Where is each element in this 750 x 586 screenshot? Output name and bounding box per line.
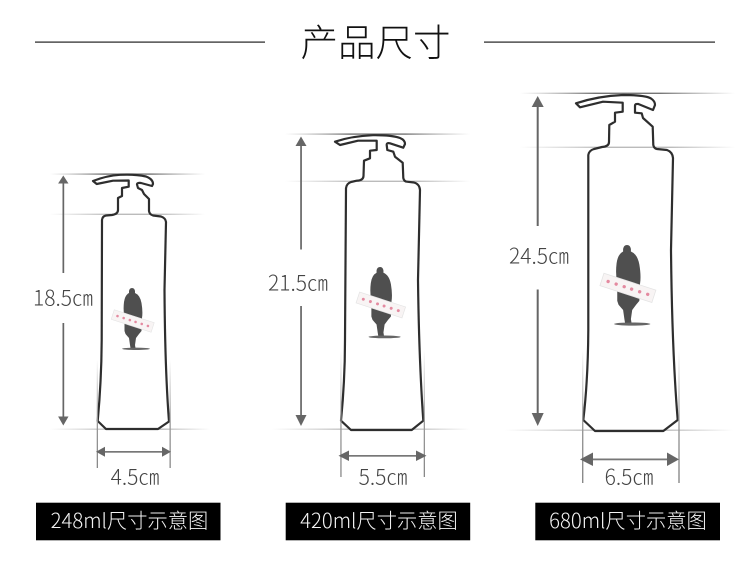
height guide lines [272,133,470,430]
caption: 680ml [535,503,720,540]
height label: 24.5㎝ [509,240,569,270]
bottle outline [335,135,423,430]
width label: 6.5㎝ [605,462,653,492]
height arrow [296,136,306,426]
panel: 248ml bottle [33,173,220,540]
caption: 248ml [36,503,220,540]
title: 产品尺寸 [300,12,450,67]
width arrow and side guides [580,350,680,483]
width arrow and side guides [96,360,171,468]
width arrow and side guides [338,350,426,477]
panel: 680ml bottle [505,93,735,540]
bottle outline [93,175,169,429]
height guide lines [50,173,210,430]
brand figure [356,267,406,338]
height arrow [532,96,544,426]
brand figure [111,288,154,350]
height label: 18.5㎝ [33,282,93,312]
panel: 420ml bottle [268,133,470,540]
caption: 248ml: 248ml尺寸示意图 [51,504,208,534]
height arrow [58,176,68,426]
brand figure [600,245,656,326]
caption: 680ml: 680ml尺寸示意图 [549,504,707,534]
height guide lines [505,93,735,431]
width label: 4.5㎝ [111,462,159,492]
caption: 420ml [286,503,470,540]
width label: 5.5㎝ [359,462,407,492]
bottle outline [576,95,678,431]
height label: 21.5㎝ [268,268,328,298]
caption: 420ml: 420ml尺寸示意图 [300,504,458,534]
